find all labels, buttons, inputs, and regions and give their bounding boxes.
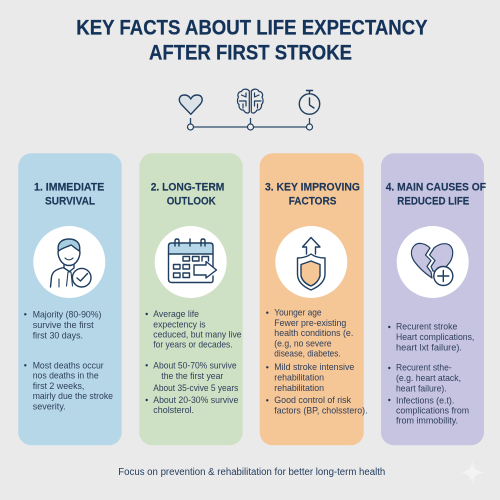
- text: main causes facts: heart failure).: [396, 383, 447, 393]
- text: main causes facts: Infections (e.t).: [396, 395, 454, 405]
- text: long-term outlook facts: [146, 309, 242, 415]
- panel: long-term outlook: [139, 153, 243, 445]
- icon: person with check: [33, 226, 105, 298]
- text: long-term outlook facts: Average life: [153, 309, 199, 319]
- heading: main causes of reduced life: 4. MAIN CAUSES OF: [386, 182, 486, 194]
- icon: sparkle: [461, 461, 484, 484]
- heading: long-term outlook: 2. LONG-TERM: [151, 182, 224, 194]
- text: key improving factors: disease, diabetes.: [274, 349, 341, 359]
- text: long-term outlook facts: ceduced, but many live: [153, 329, 242, 339]
- heading: long-term outlook: [151, 182, 224, 208]
- heading: immediate survival: SURVIVAL: [45, 196, 95, 208]
- text: immediate survival facts: survive the first: [33, 320, 94, 330]
- heading: main causes of reduced life: REDUCED LIFE: [397, 196, 469, 208]
- text: key improving factors: Fewer pre-existing: [274, 318, 346, 328]
- text: key improving factors: [266, 308, 368, 415]
- footer text: Focus on prevention & rehabilitation for better long-term health: [118, 467, 385, 478]
- text: long-term outlook facts: cholsterol.: [153, 405, 194, 415]
- text: main causes facts: from immobility.: [396, 416, 458, 426]
- text: main causes facts: [388, 322, 474, 426]
- text: main causes facts: Recurent stroke: [396, 322, 457, 332]
- icon: shield with arrow: [275, 226, 347, 298]
- text: immediate survival facts: first 30 days.: [33, 330, 83, 340]
- text: immediate survival facts: nos deaths in the: [33, 371, 99, 381]
- text: immediate survival facts: [24, 309, 113, 412]
- text: key improving factors: Mild stroke intensive: [274, 362, 354, 372]
- text: main causes facts: Heart complications,: [396, 332, 474, 342]
- text: main causes facts: heart lxt failure).: [396, 343, 462, 353]
- text: key improving factors: rehabilitation: [274, 383, 324, 393]
- heading: key improving factors: [265, 182, 360, 208]
- text: long-term outlook facts: the the first year: [161, 371, 223, 381]
- title: [76, 16, 428, 64]
- text: main causes facts: Recurent sthe-: [396, 363, 452, 373]
- text: long-term outlook facts: expectency is: [153, 319, 206, 329]
- heading: key improving factors: 3. KEY IMPROVING: [265, 182, 360, 194]
- panel: immediate survival: [18, 153, 122, 445]
- panel: key improving factors: [260, 153, 368, 445]
- text: key improving factors: Younger age: [274, 308, 322, 318]
- icon: stopwatch: [299, 90, 320, 114]
- text: immediate survival facts: first 2 weeks,: [33, 381, 84, 391]
- text: long-term outlook facts: About 50-70% survive: [153, 360, 237, 370]
- icon: heart: [179, 95, 202, 114]
- heading: long-term outlook: OUTLOOK: [167, 196, 216, 208]
- text: immediate survival facts: mairly due the stroke: [33, 391, 113, 401]
- text: long-term outlook facts: About 35-cvive 5 years: [153, 383, 239, 393]
- heading: main causes of reduced life: [386, 182, 486, 208]
- text: key improving factors: health conditions (e.: [274, 328, 353, 338]
- title: KEY FACTS ABOUT LIFE EXPECTANCY: [76, 16, 428, 40]
- heading: immediate survival: [34, 182, 104, 208]
- heading: immediate survival: 1. IMMEDIATE: [34, 182, 104, 194]
- text: long-term outlook facts: for years or decades.: [153, 340, 233, 350]
- text: immediate survival facts: Most deaths occur: [33, 360, 104, 370]
- text: long-term outlook facts: About 20-30% survive: [153, 395, 238, 405]
- timeline icons: [179, 89, 320, 130]
- text: immediate survival facts: Majority (80-90%): [33, 309, 101, 319]
- title: AFTER FIRST STROKE: [149, 42, 352, 64]
- text: key improving factors: Good control of risk: [274, 395, 351, 405]
- icon: broken heart with plus: [397, 226, 469, 298]
- text: key improving factors: factors (BP, cholsstero).: [274, 405, 368, 415]
- text: key improving factors: rehabilitation: [274, 372, 324, 382]
- icon: brain: [237, 89, 263, 113]
- text: immediate survival facts: severity.: [33, 402, 66, 412]
- text: main causes facts: (e.g. heart atack,: [396, 373, 461, 383]
- text: main causes facts: complications from: [396, 405, 469, 415]
- icon: calendar with arrow: [155, 226, 227, 298]
- heading: key improving factors: FACTORS: [289, 196, 336, 208]
- text: key improving factors: (e.g, no severe: [274, 338, 332, 348]
- connector line: [188, 118, 312, 130]
- panel: main causes of reduced life: [381, 153, 486, 445]
